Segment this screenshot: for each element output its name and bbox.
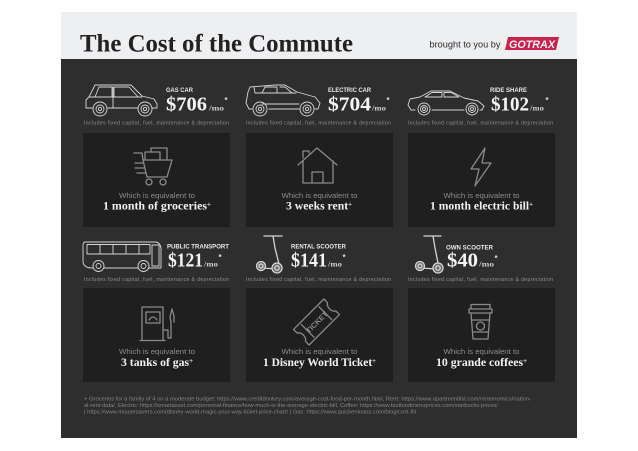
panel: groceries equivalent: + xyxy=(207,200,211,208)
title: The Cost of the Commute xyxy=(80,30,353,58)
panel: rental scooter: * xyxy=(342,253,346,262)
panel: public transport: Includes fixed capital, fuel, maintenance & depreciation xyxy=(84,277,229,283)
panel: disney ticket equivalent xyxy=(246,288,393,382)
icon: shopping cart xyxy=(134,148,172,185)
panel: gas car: /mo xyxy=(208,104,224,112)
panel: electric car: /mo xyxy=(371,104,386,112)
panel: public transport xyxy=(83,242,229,283)
panel: groceries equivalent xyxy=(83,133,230,227)
icon: ticket: TICKET xyxy=(304,309,330,335)
panel: public transport: * xyxy=(218,253,222,262)
brought to you by logo: brought to you by xyxy=(430,40,501,50)
panel: gas car xyxy=(84,85,229,126)
icon: gas pump xyxy=(140,307,174,340)
panel: electric bill equivalent xyxy=(408,133,555,227)
icon: house xyxy=(298,148,337,183)
panel: gas car: GAS CAR xyxy=(166,87,193,94)
icon: rental scooter xyxy=(256,236,282,273)
panel: gas equivalent: Which is equivalent to xyxy=(119,347,195,356)
panel: gas equivalent: + xyxy=(189,357,193,365)
footnote sources: al-rent-data/, Electric: https://smartasset.com/personal-finance/how-much-is-the-average-electric-bill, Coffee: https://www.fastfoodmenuprices.com/starbucks-prices/ xyxy=(84,403,499,409)
icon: ticket xyxy=(294,299,339,345)
panel: electric car xyxy=(246,85,391,126)
panel: disney ticket equivalent: 1 Disney World Ticket xyxy=(263,355,377,369)
panel: own scooter: OWN SCOOTER xyxy=(446,244,493,252)
panel: rental scooter: RENTAL SCOOTER xyxy=(291,244,346,250)
panel: gas car: Includes fixed capital, fuel, maintenance & depreciation xyxy=(84,120,229,126)
panel: rent equivalent: 3 weeks rent xyxy=(286,198,350,212)
panel: groceries equivalent: 1 month of groceries xyxy=(103,198,208,212)
icon: electric car xyxy=(246,85,320,116)
footnote sources xyxy=(84,396,531,416)
panel: disney ticket equivalent: Which is equivalent to xyxy=(282,347,358,356)
panel: public transport: /mo xyxy=(203,260,218,268)
icon: gas car xyxy=(86,85,157,116)
footnote sources: + Groceries for a family of 4 on a moderate budget: https://www.creditdonkey.com/average-cost-food-per-month.html, Rent: https://www.apartmentlist.com/rentonomics/nation- xyxy=(84,396,531,402)
dark background panel xyxy=(61,59,577,438)
panel: rental scooter: Includes fixed capital, fuel, maintenance & depreciation xyxy=(246,277,391,283)
footnote sources: | https://www.mousesavers.com/disney-world-magic-your-way-ticket-price-chart/ | Gas: https://www.quickenloans.com/blog/cost-fill xyxy=(84,410,416,416)
brought to you by logo: GOTRAX xyxy=(509,39,556,51)
panel: own scooter xyxy=(408,236,553,283)
panel: rent equivalent: + xyxy=(348,200,352,208)
header band xyxy=(61,12,577,59)
panel: coffee equivalent: Which is equivalent to xyxy=(444,347,520,356)
panel: rental scooter xyxy=(246,236,391,283)
panel: ride share xyxy=(408,87,553,126)
icon: bus xyxy=(83,242,161,272)
panel: rent equivalent: Which is equivalent to xyxy=(282,191,358,200)
panel: public transport: $121 xyxy=(168,250,203,272)
icon: own scooter xyxy=(416,236,443,273)
icon: coffee cup xyxy=(469,304,492,339)
panel: gas equivalent: 3 tanks of gas xyxy=(121,355,191,369)
panel: coffee equivalent: 10 grande coffees xyxy=(436,355,525,369)
panel: electric bill equivalent: + xyxy=(529,200,533,208)
panel: own scooter: * xyxy=(494,254,498,263)
panel: groceries equivalent: Which is equivalent to xyxy=(119,191,195,200)
brought to you by logo xyxy=(430,37,559,51)
panel: ride share: Includes fixed capital, fuel, maintenance & depreciation xyxy=(408,120,553,126)
panel: ride share: /mo xyxy=(529,104,544,112)
panel: public transport: PUBLIC TRANSPORT xyxy=(167,244,229,250)
panel: own scooter: $40 xyxy=(447,250,478,272)
panel: ride share: $102 xyxy=(491,94,529,116)
panel: ride share: * xyxy=(546,96,550,105)
panel: electric car: Includes fixed capital, fuel, maintenance & depreciation xyxy=(246,120,391,126)
panel: rental scooter: $141 xyxy=(291,250,327,272)
icon: ride share car xyxy=(408,91,484,115)
panel: coffee equivalent xyxy=(408,288,555,382)
panel: electric car: ELECTRIC CAR xyxy=(328,87,371,94)
panel: gas equivalent xyxy=(83,288,230,382)
panel: rental scooter: /mo xyxy=(327,260,342,268)
panel: disney ticket equivalent: + xyxy=(372,357,376,365)
panel: own scooter: /mo xyxy=(478,260,494,268)
panel: coffee equivalent: + xyxy=(523,357,527,365)
panel: gas car: * xyxy=(224,96,228,105)
icon: lightning bolt xyxy=(471,148,491,186)
panel: own scooter: Includes fixed capital, fuel, maintenance & depreciation xyxy=(408,277,553,283)
panel: ride share: RIDE SHARE xyxy=(490,87,528,94)
panel: electric bill equivalent: Which is equivalent to xyxy=(444,191,520,200)
panel: electric car: $704 xyxy=(328,94,371,116)
panel: electric bill equivalent: 1 month electric bill xyxy=(430,198,532,212)
panel: gas car: $706 xyxy=(166,94,207,116)
panel: electric car: * xyxy=(386,96,390,105)
panel: rent equivalent xyxy=(246,133,393,227)
